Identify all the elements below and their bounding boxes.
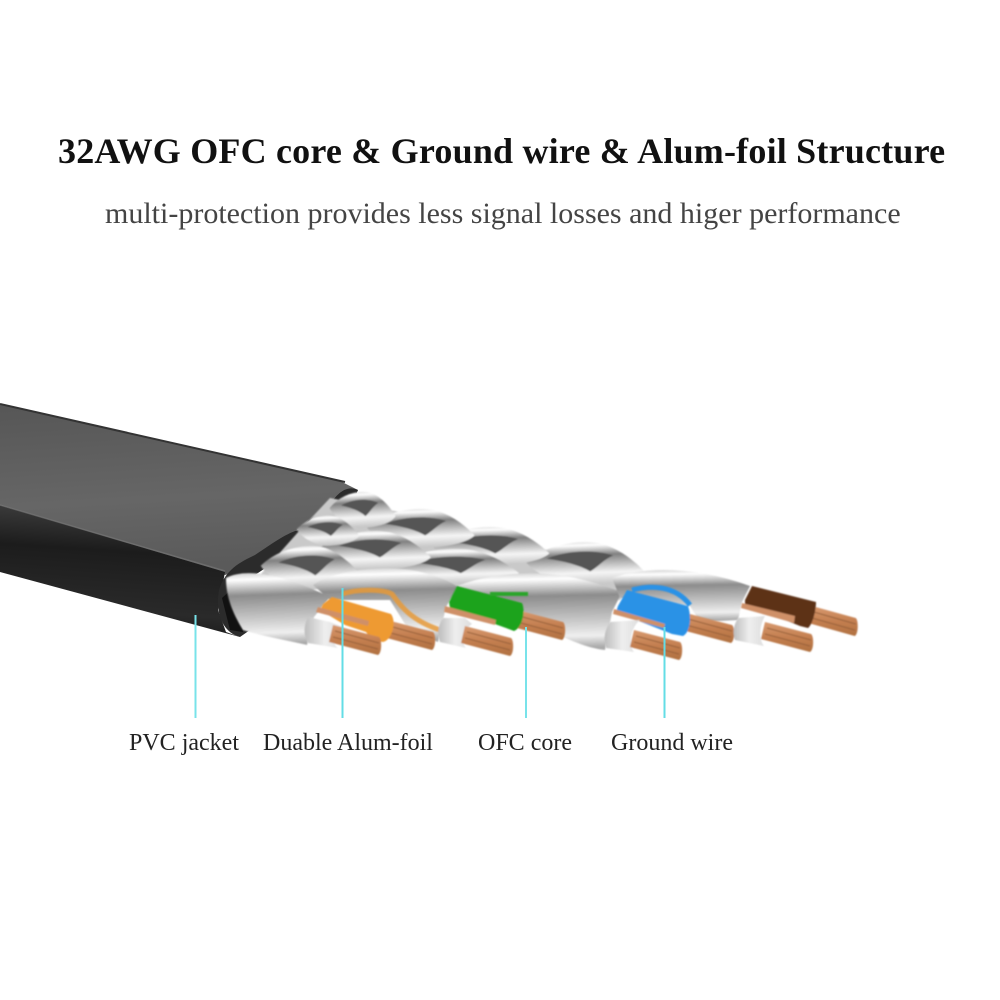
foil-shielded twisted pairs (226, 492, 750, 650)
front row far foil (261, 546, 361, 590)
leader line: alum-foil (342, 588, 344, 718)
foil base (260, 498, 640, 600)
orange inner wire (342, 590, 440, 630)
brown pair (734, 586, 858, 652)
label: Ground wire: Ground wire (611, 730, 733, 756)
label: PVC jacket: PVC jacket (129, 730, 239, 756)
middle row foil (297, 516, 519, 585)
cable body: PVC jacket (0, 404, 358, 637)
leader line: ground wire (664, 627, 666, 718)
orange pair (305, 597, 435, 655)
back row foil (330, 492, 644, 586)
blue pair (605, 587, 734, 660)
front foil 3 (450, 573, 622, 650)
leader line: PVC jacket (194, 615, 196, 718)
label: OFC core: OFC core (478, 730, 572, 756)
front foil 4 (612, 570, 750, 622)
subtitle: multi-protection provides less signal losses and higer performance (105, 197, 901, 230)
label: Duable Alum-foil: Duable Alum-foil (263, 730, 433, 756)
front foil 1 (226, 573, 330, 645)
leader line: OFC core (525, 627, 527, 718)
title: 32AWG OFC core & Ground wire & Alum-foil Structure (58, 131, 945, 171)
front foil 2 (313, 569, 458, 642)
green pair (438, 586, 565, 656)
